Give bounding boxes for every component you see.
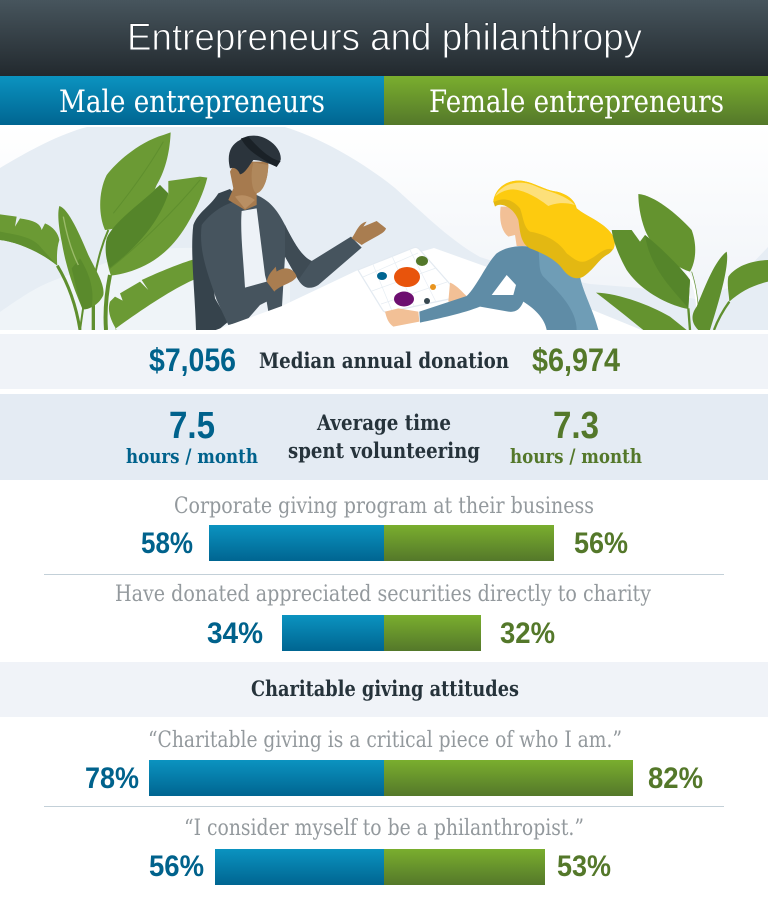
male entrepreneurs header: Male entrepreneurs <box>59 84 325 120</box>
average volunteering time row: hours / month <box>126 444 258 468</box>
average volunteering time row: hours / month <box>510 444 642 468</box>
left plant <box>0 132 207 330</box>
male entrepreneurs header <box>0 76 384 125</box>
stat: appreciated securities: 32% <box>500 617 555 650</box>
stat: corporate giving program: Corporate giving program at their business <box>174 494 594 519</box>
female entrepreneurs header <box>384 76 768 125</box>
woman <box>385 181 615 330</box>
stat: consider myself a philanthropist <box>149 816 611 885</box>
median annual donation row: Median annual donation <box>259 348 509 373</box>
tablet <box>358 247 457 312</box>
stat: corporate giving program: 58% <box>141 527 193 560</box>
stat: consider myself a philanthropist: “I consider myself to be a philanthropist.” <box>184 816 584 841</box>
stat: appreciated securities: Have donated appreciated securities directly to charity <box>115 582 651 607</box>
stat: consider myself a philanthropist: 53% <box>557 850 611 883</box>
man <box>192 136 386 330</box>
title banner: Entrepreneurs and philanthropy <box>127 17 642 59</box>
stat: critical piece of who I am <box>85 728 703 796</box>
average volunteering time row <box>0 394 768 480</box>
stat: critical piece of who I am: 78% <box>85 762 139 795</box>
illustration: entrepreneurs reviewing a tablet <box>0 125 768 331</box>
stat: critical piece of who I am: “Charitable giving is a critical piece of who I am.” <box>148 728 622 753</box>
stat: consider myself a philanthropist: 56% <box>149 850 204 883</box>
stat: corporate giving program: 56% <box>574 527 628 560</box>
stat: appreciated securities: 34% <box>207 617 263 650</box>
median annual donation row <box>0 334 768 389</box>
average volunteering time row: 7.3 <box>553 405 599 447</box>
average volunteering time row: spent volunteering <box>288 438 480 463</box>
right plant <box>596 194 768 330</box>
title banner <box>0 0 768 76</box>
stat: corporate giving program <box>141 494 628 561</box>
heading: charitable giving attitudes: Charitable giving attitudes <box>251 676 519 701</box>
median annual donation row: $6,974 <box>532 342 620 378</box>
average volunteering time row: 7.5 <box>169 405 215 447</box>
average volunteering time row: Average time <box>316 410 451 435</box>
table <box>213 248 644 331</box>
stat: appreciated securities <box>115 582 651 651</box>
heading: charitable giving attitudes <box>0 662 768 717</box>
median annual donation row: $7,056 <box>149 342 236 378</box>
stat: critical piece of who I am: 82% <box>648 762 703 795</box>
